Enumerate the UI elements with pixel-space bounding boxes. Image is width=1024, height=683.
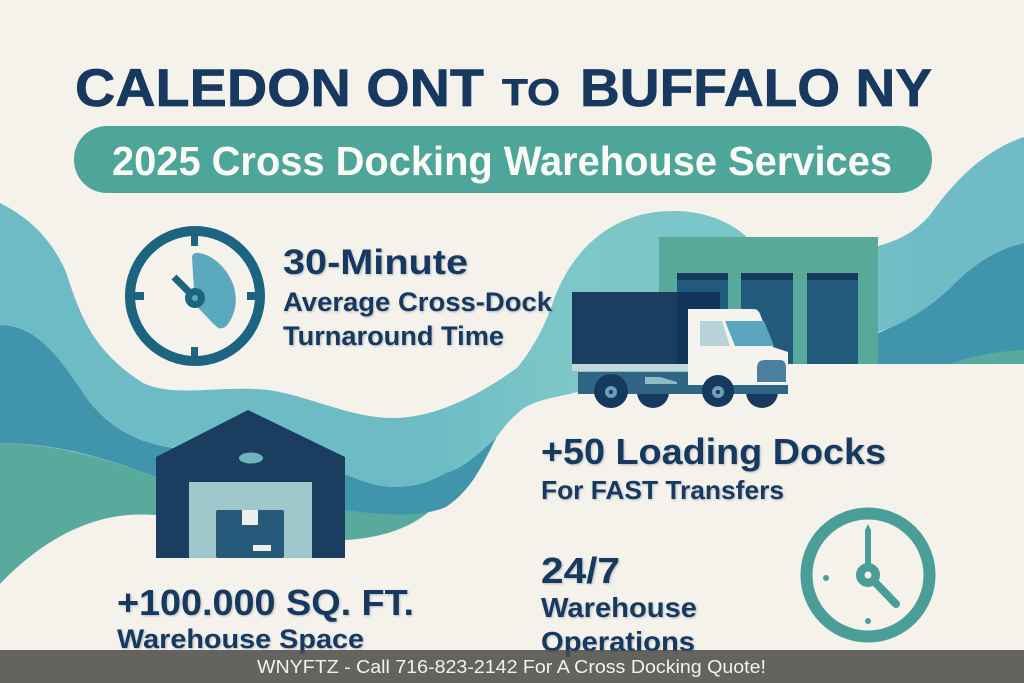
icon: wall clock [806, 514, 930, 636]
text: warehouse space: Warehouse Space [117, 624, 364, 654]
title [75, 59, 932, 118]
background waves [0, 137, 1024, 584]
title: TO [502, 72, 560, 113]
text: warehouse space: +100.000 SQ. FT. [117, 582, 414, 623]
footer bar: WNYFTZ - Call 716-823-2142 For A Cross Docking Quote! [257, 657, 766, 677]
icon: stopwatch [130, 231, 260, 361]
icon: dock building [659, 237, 878, 364]
icon: warehouse [156, 410, 345, 558]
subtitle banner [74, 126, 932, 193]
text: turnaround time: Average Cross-Dock [283, 287, 553, 317]
text: turnaround time: Turnaround Time [283, 321, 504, 351]
text: warehouse operations: Warehouse [541, 592, 697, 623]
title: BUFFALO NY [580, 59, 932, 118]
text: loading docks [541, 431, 886, 505]
text: loading docks: For FAST Transfers [541, 475, 784, 505]
text: warehouse operations [541, 550, 697, 657]
text: turnaround time: 30-Minute [283, 243, 468, 282]
text: loading docks: +50 Loading Docks [541, 431, 886, 472]
text: warehouse operations: Operations [541, 626, 695, 657]
icon: truck [572, 292, 788, 408]
subtitle banner: 2025 Cross Docking Warehouse Services [112, 138, 892, 184]
footer bar [0, 650, 1024, 683]
text: warehouse space [117, 582, 414, 654]
text: turnaround time [283, 243, 553, 351]
title: CALEDON ONT [75, 59, 484, 118]
text: warehouse operations: 24/7 [541, 550, 620, 591]
